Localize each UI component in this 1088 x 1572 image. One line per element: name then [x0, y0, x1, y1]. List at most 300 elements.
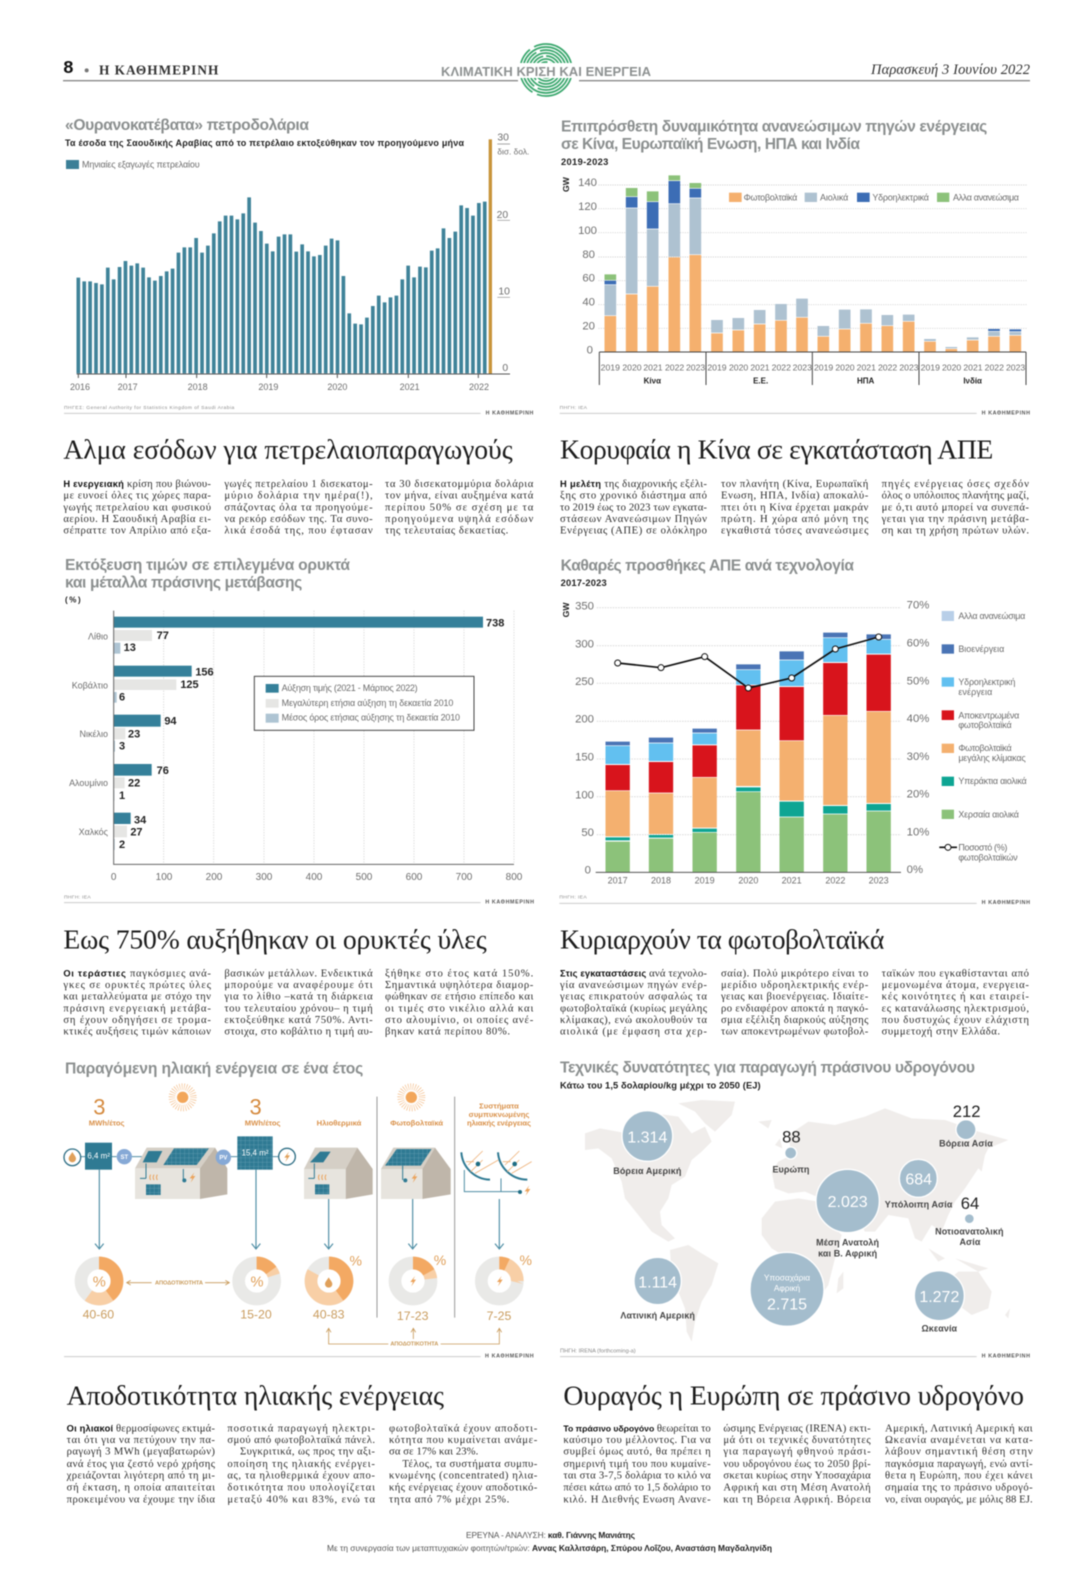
- bars: annual average: [114, 643, 120, 850]
- bubbles: [622, 1111, 976, 1326]
- column labels: MWh/έτος: [245, 1118, 281, 1127]
- headline: Αποδοτικότητα ηλιακής ενέργειας: [67, 1379, 444, 1410]
- region labels: ΗΠΑ: [857, 376, 875, 385]
- house: combined systems: [135, 1148, 227, 1199]
- body text: νου υδρογόνου έως το 2050 βρί-: [723, 1459, 871, 1470]
- y axis right labels: 70%: [907, 600, 929, 612]
- icon: ST node: ST: [121, 1155, 128, 1161]
- region labels: Βόρεια Αμερική: [613, 1166, 681, 1176]
- date: Παρασκευή 3 Ιουνίου 2022: [870, 62, 1030, 78]
- panel: green hydrogen map: [560, 1060, 1030, 1360]
- arrow: efficiency lower: ΑΠΟΔΟΤΙΚΟΤΗΤΑ: [390, 1342, 438, 1348]
- body text: γωγής πετρελαίου και φυσικού: [62, 502, 211, 513]
- value labels: 1: [119, 790, 125, 802]
- legend: Αποκεντρωμένα: [958, 710, 1019, 720]
- article: oil revenues: [62, 433, 534, 537]
- body text: με ευνοεί όλες τις χώρες παρα-: [63, 491, 211, 502]
- x axis labels: 2022: [825, 876, 845, 886]
- column labels: ηλιακής ενέργειας: [467, 1118, 531, 1127]
- x axis year labels: 2020: [622, 363, 642, 373]
- body text: φώθηκαν σε ετήσιο επίπεδο και: [385, 992, 533, 1003]
- region labels: και Β. Αφρική: [818, 1249, 877, 1259]
- body text: οι τιμές στο νικέλιο αλλά και: [385, 1003, 533, 1014]
- bubble values: 1.114: [638, 1274, 677, 1291]
- column labels: Συστήματα: [479, 1102, 519, 1111]
- body text: σμια εξέλιξη διαρκούς αύξησης: [721, 1015, 869, 1026]
- y axis labels: 20: [582, 320, 595, 332]
- y axis left labels: 100: [575, 789, 594, 801]
- x axis labels: 2020: [738, 876, 758, 886]
- house: photovoltaics: [381, 1148, 451, 1199]
- column labels: Φωτοβολταϊκά: [390, 1118, 443, 1127]
- x axis year labels: 2020: [835, 363, 855, 373]
- donut: 40-60: [81, 1263, 117, 1299]
- body text: Αφρική και στη Μέση Ανατολή: [723, 1482, 871, 1493]
- donut: 40-83: [311, 1263, 347, 1299]
- value labels: 34: [134, 814, 147, 826]
- bars: largest annual rise: [114, 630, 176, 837]
- body text: γειας και βιοενέργειας. Ιδιαίτε-: [720, 992, 869, 1003]
- body text: πτει ότι η Κίνα έρχεται μακράν: [721, 502, 869, 513]
- y axis left labels: 50: [581, 827, 594, 839]
- PV panel 15.4 m2: 15,4 m²: [241, 1149, 269, 1158]
- x axis labels: 2020: [327, 382, 347, 392]
- efficiency ranges: 40-83: [313, 1307, 345, 1321]
- body text: τον πλανήτη (Κίνα, Ευρωπαϊκή: [721, 479, 869, 490]
- body text: να ρεκόρ εσόδων της. Τα συνο-: [224, 514, 373, 525]
- body text: λάβουν σημαντική θέση στην: [885, 1447, 1033, 1458]
- region labels: Ωκεανία: [921, 1324, 958, 1334]
- x axis year labels: 2023: [793, 363, 812, 373]
- body text: Το πράσινο υδρογόνο θεωρείται το: [563, 1423, 711, 1434]
- y axis unit: GW: [561, 602, 571, 617]
- body text: σαία). Πολύ μικρότερο είναι το: [721, 968, 868, 979]
- source: ΠΗΓΗ: IRENA (forthcoming-a): [560, 1348, 636, 1354]
- body text: χρειάζονται λιγότερη από τη μι-: [66, 1471, 215, 1482]
- body text: Ενωση, ΗΠΑ, Ινδία) αποκαλύ-: [721, 491, 869, 502]
- body text: σκεται κυρίως στην Υποσαχάρια: [723, 1471, 871, 1482]
- article: photovoltaics dominate: [559, 923, 1029, 1038]
- chart title: Εκτόξευση τιμών σε επιλεγμένα ορυκτά: [65, 557, 350, 574]
- legend: Μέσος όρος ετήσιας αύξησης τη δεκαετία 2010: [282, 713, 460, 723]
- efficiency ranges: 7-25: [487, 1309, 511, 1323]
- x axis year labels: 2019: [707, 363, 727, 373]
- region labels: Κίνα: [644, 376, 661, 385]
- body text: Η ενεργειακή κρίση που βιώνου-: [63, 479, 211, 490]
- body text: πράσινη ενεργειακή μετάβα-: [63, 1003, 211, 1014]
- x axis labels: 2021: [400, 382, 420, 392]
- x axis year labels: 2020: [942, 363, 961, 373]
- headline: Κορυφαία η Κίνα σε εγκατάσταση ΑΠΕ: [560, 433, 993, 464]
- body text: οποίηση της ηλιακής ενέργει-: [227, 1459, 375, 1470]
- body text: μύριο δολάρια την ημέρα(!),: [224, 491, 373, 502]
- y axis labels: 0: [587, 344, 593, 356]
- x axis year labels: 2020: [729, 363, 748, 373]
- body text: [62, 479, 534, 537]
- credit: Η ΚΑΘΗΜΕΡΙΝΗ: [982, 410, 1030, 416]
- legend: Αιολικά: [820, 192, 848, 202]
- bubble values: 1.314: [627, 1129, 667, 1146]
- bars: monthly oil exports: [78, 197, 485, 373]
- bubble values: 2.023: [828, 1194, 868, 1211]
- body text: που δυστυχώς έχουν ελάχιστη: [882, 1015, 1029, 1026]
- value labels: 76: [157, 765, 169, 777]
- icon: electricity node: [279, 1148, 295, 1165]
- y axis labels: 100: [578, 225, 597, 237]
- body text: θετα η Ευρώπη, που έχει κάνει: [885, 1471, 1033, 1482]
- body text: Συγκριτικά, ως προς την αξι-: [240, 1447, 375, 1458]
- x axis year labels: 2022: [772, 363, 791, 373]
- category labels: [69, 631, 109, 837]
- body text: με ό,τι αυτό μπορεί να συνεπά-: [882, 502, 1029, 513]
- body text: βασικών μετάλλων. Ενδεικτικά: [224, 968, 373, 979]
- credit: Η ΚΑΘΗΜΕΡΙΝΗ: [982, 900, 1030, 906]
- column dividers: [377, 1097, 455, 1318]
- headline: Ουραγός η Ευρώπη σε πράσινο υδρογόνο: [563, 1379, 1024, 1410]
- x axis labels: 2018: [188, 382, 208, 392]
- x axis year labels: 2022: [985, 363, 1004, 373]
- legend: Μηνιαίες εξαγωγές πετρελαίου: [82, 160, 200, 170]
- gridlines: [164, 611, 514, 864]
- donut: 7-25: [481, 1263, 517, 1299]
- body text: ρο ενδιαφέρον αποκτά η παγκό-: [721, 1003, 869, 1014]
- y axis left labels: 0: [585, 865, 591, 877]
- body text: προηγούμενα υψηλά εσόδων: [385, 514, 534, 525]
- body text: πρώτη. Η χώρα από μόνη της: [721, 514, 869, 525]
- x axis labels: 2019: [695, 876, 715, 886]
- chart title: Τεχνικές δυνατότητες για παραγωγή πράσινου υδρογόνου: [560, 1060, 975, 1077]
- value labels: 13: [124, 642, 136, 654]
- body text: στάσεων Ανανεώσιμων Πηγών: [560, 514, 707, 525]
- x axis labels: 400: [306, 872, 323, 883]
- body text: Η μελέτη της διαχρονικής εξέλι-: [560, 479, 707, 490]
- efficiency ranges: 40-60: [83, 1307, 114, 1321]
- value labels: 125: [180, 679, 199, 691]
- x axis labels: 700: [456, 872, 473, 883]
- body text: ταϊκών που εγκαθίστανται από: [882, 968, 1029, 979]
- legend: Υπεράκτια αιολικά: [958, 776, 1027, 786]
- source: ΠΗΓΗ: IEA: [560, 405, 588, 411]
- panel: net additions chart: [559, 558, 1030, 906]
- body text: της τελευταίας δεκαετίας.: [385, 526, 508, 537]
- y axis labels: 120: [578, 201, 597, 213]
- body text: σημερινή τιμή του που κυμαίνε-: [563, 1459, 711, 1470]
- body text: στοιχα, στο κοβάλτιο η τιμή αυ-: [224, 1027, 373, 1038]
- stacked bars: [610, 175, 1015, 352]
- x axis year labels: 2021: [963, 363, 983, 373]
- orange scale bar: [489, 139, 492, 374]
- legend: φωτοβολταϊκά: [958, 720, 1012, 730]
- body text: Ενέργειας (ΑΠΕ) σε ολόκληρο: [560, 526, 707, 537]
- x axis year labels: 2019: [921, 363, 940, 373]
- y axis right labels: 10%: [907, 826, 929, 838]
- chart title: Επιπρόσθετη δυναμικότητα ανανεώσιμων πηγών ενέργειας: [561, 119, 987, 136]
- y axis left labels: [575, 600, 594, 877]
- solar thermal collector 6.4 m2: [85, 1143, 112, 1170]
- bubble values: 1.272: [919, 1289, 959, 1306]
- credit: Η ΚΑΘΗΜΕΡΙΝΗ: [486, 410, 533, 416]
- value labels: 6: [119, 691, 125, 703]
- body text: καύσιμο του μέλλοντος. Για να: [563, 1435, 711, 1446]
- x axis year labels: 2022: [665, 363, 684, 373]
- x axis year labels: [601, 363, 1025, 373]
- arrow: efficiency upper: ΑΠΟΔΟΤΙΚΟΤΗΤΑ: [155, 1281, 203, 1287]
- region labels: Ινδία: [963, 376, 982, 385]
- value labels: 3: [119, 741, 125, 753]
- body text: κιλό. Η Διεθνής Ενωση Ανανε-: [563, 1494, 711, 1505]
- credit: Η ΚΑΘΗΜΕΡΙΝΗ: [485, 1353, 534, 1359]
- article: hydrogen: [563, 1379, 1033, 1505]
- y axis right labels: 60%: [907, 637, 929, 649]
- value labels: 77: [157, 630, 169, 642]
- body text: εκτοξεύθηκε κατά 750%. Αντι-: [224, 1015, 373, 1026]
- article: minerals: [62, 923, 534, 1038]
- value labels: 156: [195, 666, 214, 678]
- x axis labels: 300: [256, 872, 273, 883]
- chart title: [561, 119, 987, 153]
- x axis labels: 2023: [869, 876, 889, 886]
- value labels: [119, 617, 504, 851]
- logo: green fingerprint: [510, 44, 582, 96]
- y axis right labels: 50%: [907, 675, 929, 687]
- region labels: Λατινική Αμερική: [620, 1310, 695, 1320]
- bars: price rise: [114, 617, 483, 824]
- donut centre symbols: %: [519, 1252, 532, 1268]
- bubble values: 2.715: [767, 1296, 807, 1313]
- body text: ται στα 3-7,5 δολάρια το κιλό να: [563, 1471, 711, 1482]
- panel: renewable capacity chart: [560, 119, 1030, 416]
- chart subtitle: Τα έσοδα της Σαουδικής Αραβίας από το πετρέλαιο εκτοξεύθηκαν τον προηγούμενο μήνα: [65, 138, 464, 148]
- line: PV share: [615, 634, 882, 691]
- x axis year labels: 2021: [643, 363, 663, 373]
- x axis year labels: 2023: [1006, 363, 1025, 373]
- x axis year labels: 2019: [814, 363, 833, 373]
- icon: PV node: [216, 1150, 231, 1165]
- article: solar efficiency: [66, 1379, 538, 1505]
- body text: [66, 1423, 538, 1505]
- y axis right labels: 0%: [907, 864, 923, 876]
- y axis labels: 80: [582, 249, 595, 261]
- category labels: Αλουμίνιο: [69, 778, 108, 788]
- x axis labels: [608, 876, 889, 886]
- bubble values: Υποσαχάρια: [764, 1272, 810, 1282]
- efficiency ranges: 17-23: [397, 1309, 429, 1323]
- PV panel 15.4 m2: [237, 1136, 273, 1170]
- legend: ενέργεια: [958, 687, 992, 697]
- bubble values: 212: [953, 1102, 981, 1121]
- body text: γκες σε ορυκτές πρώτες ύλες: [62, 980, 212, 991]
- body text: κότητα που κυμαίνεται ανάμε-: [389, 1435, 538, 1446]
- legend: [254, 676, 474, 730]
- legend: Αλλα ανανεώσιμα: [953, 192, 1019, 202]
- x axis year labels: 2019: [601, 363, 620, 373]
- body text: λικά έσοδά της, που έφτασαν: [224, 526, 373, 537]
- body text: τα 30 δισεκατομμύρια δολάρια: [385, 479, 534, 490]
- y axis labels: 60: [582, 273, 595, 285]
- y axis right labels: 20%: [907, 789, 929, 801]
- icon: water heater node: [64, 1149, 81, 1166]
- x axis year labels: 2021: [857, 363, 876, 373]
- source: ΠΗΓΕΣ: General Authority for Statistics Kingdom of Saudi Arabia: [64, 405, 235, 411]
- body text: ανά έτος για ζεστό νερό χρήσης: [67, 1459, 216, 1470]
- column labels: 3: [93, 1094, 105, 1119]
- page number and masthead: 8: [63, 57, 73, 77]
- body text: Αμερική, Λατινική Αμερική και: [885, 1423, 1033, 1434]
- x axis labels: 2019: [258, 382, 278, 392]
- headline: Κυριαρχούν τα φωτοβολταϊκά: [560, 923, 884, 954]
- y axis labels: [578, 177, 597, 356]
- icon: sun right: [401, 1087, 422, 1108]
- y axis labels: 40: [582, 297, 595, 309]
- legend: Χερσαία αιολικά: [958, 809, 1019, 819]
- body text: κνωμένης (concentrated) ηλια-: [389, 1471, 538, 1482]
- bubble values: 684: [905, 1171, 932, 1188]
- value labels: 22: [128, 777, 140, 789]
- chart title: [65, 557, 350, 591]
- body text: ση έχουν οδηγήσει σε τρομα-: [63, 1015, 211, 1026]
- y axis right labels: 30%: [907, 751, 929, 763]
- body text: κές κοινότητες ή και εταιρεί-: [882, 992, 1029, 1003]
- efficiency ranges: 15-20: [240, 1307, 272, 1321]
- legend: Φωτοβολταϊκά: [744, 192, 797, 202]
- x axis year labels: 2022: [878, 363, 897, 373]
- body text: στο αλουμίνιο, οι οποίες ανέ-: [385, 1015, 534, 1026]
- icon: concentrated solar dishes: [461, 1151, 532, 1196]
- y axis right labels: [907, 600, 929, 876]
- chart subtitle: 2017-2023: [561, 578, 607, 588]
- body text: μεμονωμένα άτομα, ενεργεια-: [882, 980, 1029, 991]
- region labels: Νοτιοανατολική: [935, 1226, 1004, 1236]
- headline: Αλμα εσόδων για πετρελαιοπαραγωγούς: [63, 433, 513, 464]
- panel: mineral prices chart: [64, 557, 534, 906]
- x axis labels: 2017: [608, 876, 628, 886]
- body text: κής ενέργειας έχουν αποδοτικό-: [389, 1482, 538, 1493]
- body text: Τέλος, τα συστήματα συμπυ-: [402, 1459, 538, 1470]
- body text: γεται για την πράσινη μετάβα-: [881, 514, 1029, 525]
- icon: PV node: PV: [219, 1156, 227, 1162]
- chart title: σε Κίνα, Ευρωπαϊκή Ενωση, ΗΠΑ και Ινδία: [561, 136, 860, 153]
- column labels: συμπυκνωμένης: [469, 1110, 529, 1119]
- y axis left labels: 150: [575, 752, 594, 764]
- y axis labels: δισ. δολ.: [497, 146, 529, 156]
- body text: Οι τεράστιες παγκόσμιες ανά-: [63, 968, 211, 979]
- chart subtitle: 2019-2023: [561, 157, 608, 167]
- x axis labels: [70, 382, 489, 392]
- footer credits: [327, 1530, 772, 1553]
- donut centre symbols: [93, 1252, 532, 1291]
- page number and masthead: Η ΚΑΘΗΜΕΡΙΝΗ: [99, 62, 219, 77]
- region labels: Ασία: [959, 1237, 981, 1247]
- credit: Η ΚΑΘΗΜΕΡΙΝΗ: [982, 1354, 1030, 1360]
- body text: το 2019 έως το 2023 των εγκατα-: [560, 502, 707, 513]
- x axis labels: 2018: [651, 876, 671, 886]
- body text: Οι ηλιακοί θερμοσίφωνες εκτιμά-: [67, 1423, 215, 1434]
- body text: αερίου. Η Σαουδική Αραβία ει-: [63, 514, 211, 525]
- y axis labels: 10: [498, 286, 510, 297]
- x axis labels: 2021: [782, 876, 802, 886]
- body text: αιολικά (με έμφαση στα χερ-: [560, 1027, 707, 1038]
- arrows down: [95, 1170, 504, 1249]
- body text: σέπραττε τον Απρίλιο από εξα-: [63, 526, 211, 537]
- legend: Υδροηλεκτρική: [958, 677, 1015, 687]
- x axis labels: 2022: [469, 382, 489, 392]
- donut: 17-23: [395, 1263, 431, 1299]
- x axis year labels: 2023: [899, 363, 919, 373]
- y axis labels: 0: [502, 363, 508, 374]
- footer credits: Με τη συνεργασία των μεταπτυχιακών φοιτητών/τριών: Αννας Καλλιτσάρη, Σπύρου Λοΐζου, Αναστάση Μαγδαληνίδη: [327, 1543, 772, 1553]
- value labels: 23: [128, 728, 140, 740]
- world map: [585, 1100, 1010, 1342]
- body text: ας, τα ηλιοθερμικά έχουν απο-: [227, 1471, 375, 1482]
- body text: για το λίθιο –κατά τη διάρκεια: [223, 992, 373, 1003]
- region labels: Ε.Ε.: [753, 376, 768, 385]
- body text: σα σε 17% και 23%.: [389, 1447, 478, 1458]
- column labels: [89, 1094, 531, 1127]
- category labels: Λίθιο: [88, 631, 108, 641]
- column labels: Ηλιοθερμικά: [317, 1118, 362, 1127]
- category labels: Κοβάλτιο: [72, 680, 108, 690]
- x axis labels: 100: [156, 872, 173, 883]
- bubble values: 88: [782, 1128, 801, 1147]
- donut centre symbols: %: [93, 1275, 106, 1291]
- y axis labels: [497, 133, 529, 374]
- body text: σή έκταση, η οποία απαιτείται: [67, 1482, 215, 1493]
- chart title: «Ουρανοκατέβατα» πετροδολάρια: [65, 117, 309, 134]
- source: ΠΗΓΗ: IEA: [64, 894, 91, 900]
- body text: ποσοτικά παραγωγή ηλεκτρι-: [227, 1423, 375, 1434]
- bubble values: 64: [961, 1194, 979, 1213]
- y axis labels: 20: [497, 210, 508, 221]
- region labels: Υπόλοιπη Ασία: [885, 1200, 953, 1210]
- body text: φωτοβολταϊκά (κυρίως μεγάλης: [560, 1003, 708, 1014]
- body text: ση και τη χρήση πρώτων υλών.: [882, 526, 1029, 537]
- chart title: Παραγόμενη ηλιακή ενέργεια σε ένα έτος: [65, 1060, 363, 1077]
- header: [63, 44, 1030, 96]
- legend: Αλλα ανανεώσιμα: [958, 611, 1025, 621]
- region labels: Ευρώπη: [772, 1165, 810, 1175]
- legend: φωτοβολταϊκών: [958, 852, 1018, 862]
- body text: [559, 968, 1029, 1038]
- donut centre symbols: %: [250, 1275, 264, 1291]
- x axis labels: 600: [406, 872, 423, 883]
- donut: 15-20: [239, 1263, 275, 1299]
- legend: Βιοενέργεια: [958, 644, 1004, 654]
- body text: Ωκεανία αναμένεται να κατα-: [885, 1435, 1033, 1446]
- footer credits: ΕΡΕΥΝΑ - ΑΝΑΛΥΣΗ: καθ. Γιάννης Μανιάτης: [466, 1530, 636, 1540]
- section title: ΚΛΙΜΑΤΙΚΗ ΚΡΙΣΗ ΚΑΙ ΕΝΕΡΓΕΙΑ: [441, 64, 652, 79]
- region labels: [644, 376, 982, 385]
- gridlines: [598, 185, 1027, 328]
- legend: μεγάλης κλίμακας: [958, 753, 1026, 763]
- chart title: Καθαρές προσθήκες ΑΠΕ ανά τεχνολογία: [561, 558, 854, 575]
- x axis year labels: 2021: [750, 363, 770, 373]
- chart title: και μέταλλα πράσινης μετάβασης: [65, 574, 302, 591]
- body text: βηκαν κατά περίπου 80%.: [385, 1027, 510, 1038]
- body text: πέσει κάτω από το 1,5 δολάριο το: [563, 1482, 711, 1493]
- donut centre symbols: %: [434, 1252, 446, 1268]
- body text: πηγές ενέργειας όσες σχεδόν: [882, 479, 1029, 490]
- value labels: 738: [486, 617, 504, 629]
- y axis left labels: 300: [575, 638, 594, 650]
- body text: τον μήνα, είναι αυξημένα κατά: [385, 491, 534, 502]
- body text: φωτοβολταϊκά έχουν αποδοτι-: [389, 1423, 538, 1434]
- region labels: Μέση Ανατολή: [816, 1238, 879, 1248]
- x axis labels: 0: [111, 872, 117, 883]
- body text: δοτικότητα που υπολογίζεται: [227, 1482, 375, 1493]
- axis and group separators: [599, 352, 1026, 385]
- legend: Αύξηση τιμής (2021 - Μάρτιος 2022): [282, 683, 418, 693]
- legend: Υδροηλεκτρικά: [872, 192, 929, 202]
